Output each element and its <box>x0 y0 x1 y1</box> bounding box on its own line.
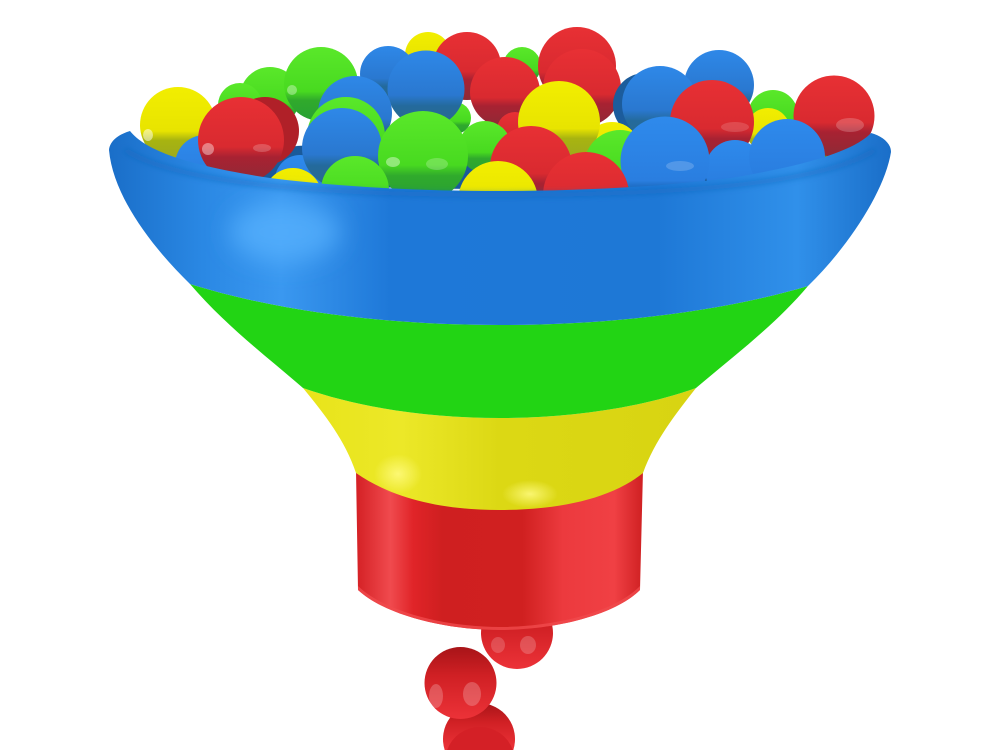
red band <box>356 470 643 630</box>
falling red balls <box>424 597 553 750</box>
green band <box>190 284 808 418</box>
blue band highlight <box>230 202 340 262</box>
yellow band light spots <box>374 454 558 508</box>
rim shading <box>125 150 875 195</box>
ball highlights <box>143 85 864 171</box>
blue band with rim <box>109 131 891 325</box>
balls heaped in the funnel <box>140 27 874 241</box>
red band lip <box>358 586 640 630</box>
yellow band <box>303 388 696 510</box>
funnel body <box>109 131 891 630</box>
